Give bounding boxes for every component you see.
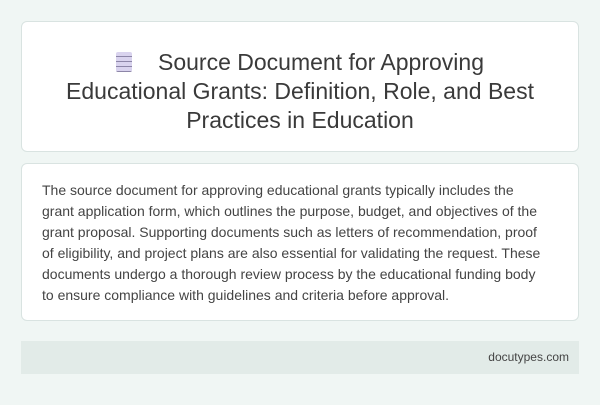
panel: title card [21, 21, 579, 152]
footer [21, 341, 579, 374]
title: Source Document for Approving Educational Grants: Definition, Role, and Best Practices in Education [66, 49, 534, 133]
panel: description [21, 163, 579, 321]
icon: document [116, 52, 132, 72]
text block: The source document for approving educational grants typically includes the grant application form, which outlines the purpose, budget, and objectives of the grant proposal. Supporting documents such as letters of recommendation, proof of eligibility, and project plans are also essential for validating the request. These documents undergo a thorough review process by the educational funding body to ensure compliance with guidelines and criteria before approval. [42, 182, 540, 303]
footer text: docutypes.com [488, 350, 569, 364]
